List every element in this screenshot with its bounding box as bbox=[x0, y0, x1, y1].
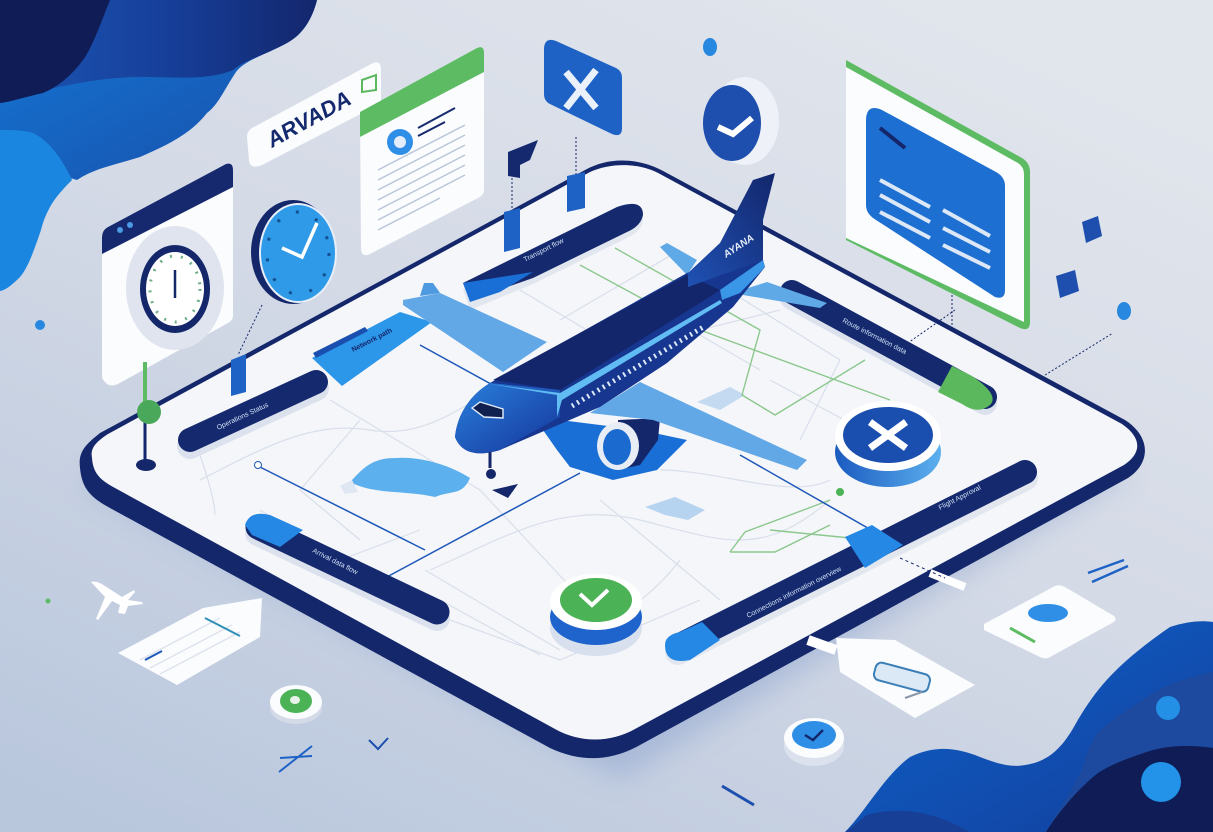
blue route lines bbox=[256, 345, 880, 578]
pin bbox=[492, 484, 518, 498]
map lakes bbox=[350, 458, 470, 497]
platform shadow bbox=[82, 194, 1130, 779]
label pill: top center bbox=[312, 204, 643, 386]
gear bbox=[488, 452, 492, 468]
note card left bbox=[118, 598, 262, 685]
green route lines bbox=[580, 248, 890, 552]
airplane bbox=[403, 173, 827, 479]
cockpit bbox=[472, 402, 503, 418]
note card right bbox=[984, 585, 1116, 658]
label pill: left bbox=[190, 382, 316, 446]
nose bbox=[455, 383, 560, 453]
small disc blue bbox=[784, 718, 844, 766]
label pill: left: Operations Status bbox=[216, 402, 270, 432]
window stripe bbox=[490, 300, 722, 417]
brand card ARVADA bbox=[247, 62, 381, 167]
tail section bbox=[720, 260, 765, 300]
decorative blobs bottom right bbox=[845, 621, 1213, 832]
near wing bbox=[590, 382, 807, 470]
window: clock card bbox=[102, 164, 233, 386]
airplane: AYANA bbox=[721, 233, 756, 261]
decorative blobs top left bbox=[0, 0, 317, 291]
far wing bbox=[403, 293, 547, 372]
label pill: bottom right bbox=[665, 472, 1025, 661]
icon: cross sign bbox=[544, 40, 622, 212]
floating squares and dots bbox=[35, 216, 1131, 375]
small glyphs bbox=[46, 558, 1128, 805]
map roads bbox=[200, 250, 900, 660]
small disc green bbox=[270, 685, 322, 724]
document card bbox=[360, 47, 484, 255]
label pill: bottom left bbox=[245, 514, 437, 618]
fuselage bbox=[455, 259, 765, 453]
circle accents bbox=[1156, 696, 1180, 720]
main map platform bbox=[80, 160, 1145, 758]
engine bbox=[618, 418, 660, 470]
label pill: right top: Route information data bbox=[841, 318, 907, 356]
small plane icon bbox=[91, 582, 143, 620]
marker: cross bbox=[835, 401, 941, 487]
small flag markers bbox=[231, 140, 538, 396]
note card: ticket bbox=[836, 638, 975, 718]
wall clock bbox=[251, 200, 337, 304]
label pill: bottom right: Connections information overview bbox=[746, 565, 843, 620]
marker: check bbox=[550, 574, 642, 656]
icon: round check badge bbox=[703, 38, 779, 165]
fuselage top bbox=[493, 275, 720, 390]
label pill: right top bbox=[792, 292, 993, 410]
far stabilizer bbox=[660, 243, 697, 275]
label pill: bottom left: Arrival data flow bbox=[311, 548, 359, 577]
flight info board bbox=[846, 60, 1030, 345]
green pin post bbox=[136, 362, 161, 471]
near stabilizer bbox=[742, 282, 827, 308]
tail fin bbox=[688, 173, 775, 287]
label pill: top center: Network path bbox=[351, 327, 393, 354]
label pill: top center: Transport flow bbox=[523, 237, 566, 264]
label pill: bottom right: Flight Approval bbox=[938, 484, 983, 512]
brand card ARVADA: ARVADA bbox=[261, 86, 355, 153]
